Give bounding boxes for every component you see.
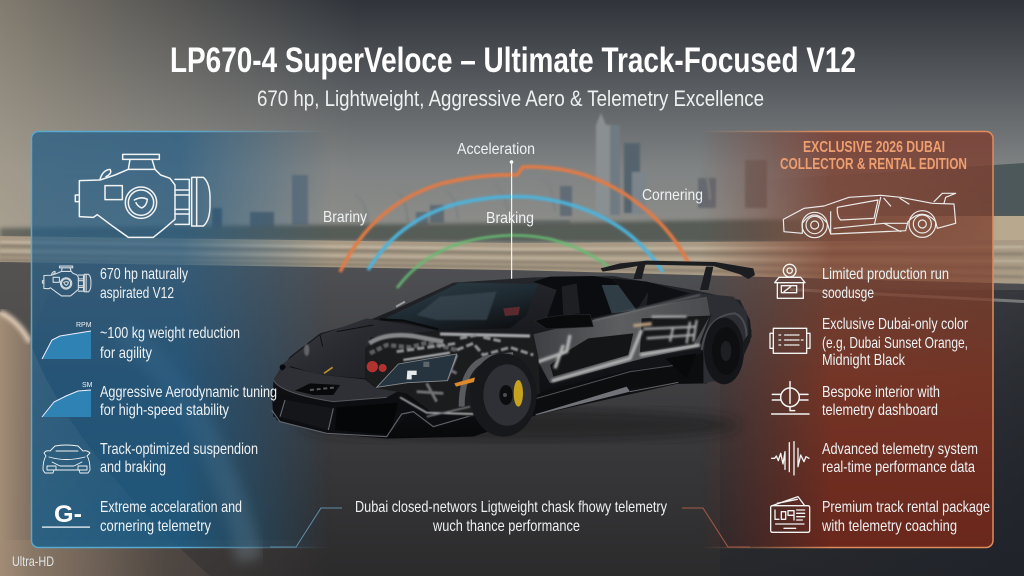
- cabin cutout: [550, 333, 633, 377]
- icon: limited production stamp: [775, 264, 805, 298]
- hood: [273, 318, 437, 380]
- side glass: [602, 285, 637, 313]
- title: LP670-4 SuperVeloce – Ultimate Track-Focused V12: [170, 41, 856, 80]
- edition text: interior: Bespoke interior with: [822, 384, 940, 401]
- spec text: weight: [100, 325, 240, 362]
- car: cutaway supercar: [272, 261, 755, 441]
- caption: [355, 499, 667, 535]
- panel: right orange edition background: [707, 130, 994, 548]
- spec text: aero: [100, 384, 277, 419]
- telemetry arcs: [340, 167, 688, 288]
- windshield: [385, 283, 538, 331]
- edition heading: EXCLUSIVE 2026 DUBAI: [803, 139, 945, 156]
- icon: car front: [43, 445, 90, 473]
- bumper: [273, 367, 403, 402]
- arc label: brariny: Brariny: [323, 209, 367, 226]
- engine bay cutaway: [365, 332, 540, 417]
- rear deck glass: [613, 278, 690, 310]
- acceleration marker line: [510, 160, 513, 305]
- car front half: [272, 283, 540, 437]
- edition text: limited: [822, 266, 949, 302]
- ultra-hd tag: Ultra-HD: [12, 553, 54, 569]
- edition text: interior: telemetry dashboard: [822, 402, 938, 419]
- icon: small engine: [42, 266, 91, 296]
- edition text: color: (e.g, Dubai Sunset Orange,: [822, 335, 968, 352]
- spec text: suspension: Track-optimized suspendion: [100, 441, 258, 458]
- spec text: suspension: and braking: [100, 459, 166, 476]
- icon: large V12 engine: [75, 154, 210, 237]
- edition text: interior: [822, 384, 940, 419]
- rear engine cutout: [640, 316, 710, 352]
- spec text: 670 hp: [100, 266, 188, 302]
- connector: right: [682, 508, 750, 547]
- edition text: color: Midnight Black: [822, 352, 906, 369]
- icon: RPM curve: [42, 322, 92, 359]
- rear wing: [601, 261, 755, 290]
- engine parts: [369, 334, 533, 417]
- arc label: acceleration: Acceleration: [457, 141, 535, 158]
- spec text: aero: for high-speed stability: [100, 402, 229, 419]
- connector: left: [270, 508, 342, 547]
- car rear half: [530, 261, 755, 415]
- icon: telemetry waveform: [772, 442, 809, 475]
- panel: left blue specs background: [30, 130, 322, 548]
- edition text: color: [822, 316, 969, 369]
- skirts: [535, 352, 703, 415]
- spec text: 670 hp: aspirated V12: [100, 285, 174, 302]
- spec text: weight: for agility: [100, 345, 152, 362]
- icon: rental card: [771, 497, 810, 532]
- edition text: rental: [821, 499, 990, 535]
- rear quarter: [647, 293, 748, 383]
- icon: G force: [42, 501, 90, 528]
- car shadow: [300, 409, 740, 441]
- icon: G force: G-: [54, 501, 82, 528]
- edition text: rental: with telemetry coaching: [821, 518, 957, 535]
- spec text: telemetry: cornering telemetry: [100, 518, 211, 535]
- car base silhouette: [273, 276, 752, 439]
- arc label: cornering: Cornering: [642, 187, 703, 204]
- headlight glass: [377, 354, 457, 387]
- icon: SM curve: SM: [82, 382, 93, 389]
- edition text: telemetry system: [822, 441, 978, 476]
- spec text: telemetry: [100, 499, 242, 535]
- red lamps: [367, 361, 387, 372]
- mirror: [535, 314, 593, 329]
- icon: SM curve: [42, 382, 93, 417]
- caption: wuch thance performance: [432, 518, 580, 535]
- icon: color chip: [770, 328, 810, 353]
- edition heading: [780, 139, 967, 173]
- door panel: [530, 297, 710, 383]
- spec text: 670 hp: 670 hp naturally: [100, 266, 188, 283]
- rear wheel: [702, 313, 747, 384]
- icon: dashboard gauge: [772, 382, 809, 414]
- edition text: color: Exclusive Dubai-only color: [822, 316, 969, 333]
- arc label: braking: Braking: [486, 210, 534, 227]
- front wheel: [454, 353, 537, 437]
- icon: side view supercar: [783, 193, 956, 238]
- spec text: weight: ~100 kg weight reduction: [100, 325, 240, 342]
- edition text: limited: Limited production run: [822, 266, 949, 283]
- spec text: suspension: [100, 441, 258, 476]
- caption: Dubai closed-networs Ligtweight chask fhowy telemetry: [355, 499, 667, 516]
- interior and cockpit: [533, 276, 637, 318]
- spec text: aero: Aggressive Aerodynamic tuning: [100, 384, 277, 401]
- subtitle: 670 hp, Lightweight, Aggressive Aero & Telemetry Excellence: [257, 86, 764, 111]
- edition text: limited: soodusge: [822, 285, 874, 302]
- edition text: telemetry system: real-time performance data: [822, 459, 975, 476]
- edition text: telemetry system: Advanced telemetry system: [822, 441, 978, 458]
- spec text: telemetry: Extreme accelaration and: [100, 499, 242, 516]
- icon: RPM curve: RPM: [76, 322, 92, 329]
